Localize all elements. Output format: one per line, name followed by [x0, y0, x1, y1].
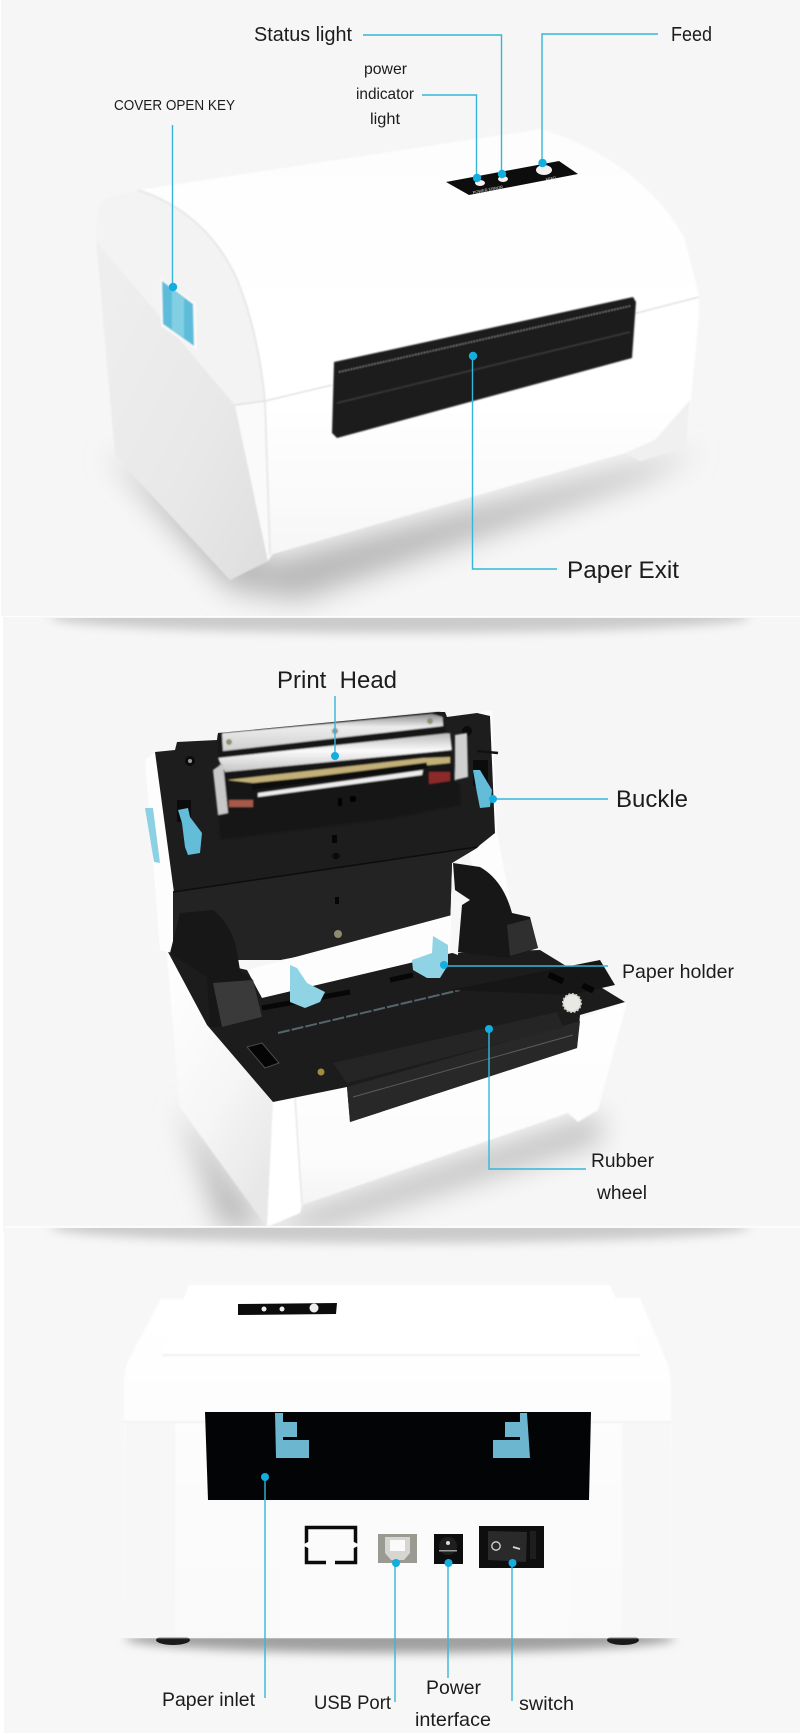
- label: Paper holder: [440, 961, 734, 983]
- cover open key, blue: [160, 278, 197, 350]
- USB port: [378, 1534, 417, 1563]
- panel: open printer interior: [145, 710, 627, 1228]
- printer body, front view: [96, 129, 699, 580]
- label: Paper holder: Paper holder: [622, 961, 734, 983]
- label: Paper inlet: [162, 1473, 269, 1711]
- label: Feed: [538, 24, 712, 167]
- control label plate: [446, 161, 578, 195]
- label: switch: [508, 1559, 574, 1715]
- white base shell: [167, 953, 627, 1227]
- rocker switch: [479, 1526, 544, 1568]
- label: Power interface: interface: [415, 1709, 491, 1731]
- right spool holder: [450, 863, 538, 958]
- lid buckles, blue: [178, 808, 202, 855]
- lid inner wall: [155, 712, 498, 960]
- label: COVER OPEN KEY: COVER OPEN KEY: [114, 98, 235, 114]
- connector panel: [277, 1519, 572, 1638]
- label: Buckle: [489, 786, 688, 813]
- label: Feed: Feed: [671, 24, 712, 46]
- label: power indicator light: light: [370, 111, 401, 128]
- white lid shell: [145, 752, 178, 952]
- paper guides, blue: [275, 1413, 530, 1458]
- control label plate: POWER ERROR: [472, 184, 503, 195]
- paper exit slot: [332, 297, 636, 438]
- divider band between panels two and three: [40, 1226, 760, 1255]
- power jack: [434, 1534, 463, 1564]
- ground shadow: [122, 1638, 678, 1660]
- panel: rear view of the printer: [124, 1285, 675, 1653]
- label: Power interface: [415, 1559, 491, 1731]
- left spool holder: [170, 910, 262, 1027]
- floor shadow: [180, 1105, 600, 1228]
- label: USB Port: [314, 1559, 400, 1714]
- label: Rubber wheel: [485, 1025, 655, 1204]
- divider band between panels one and two: [0, 601, 800, 1233]
- label: Rubber wheel: Rubber: [591, 1151, 655, 1172]
- label: Power interface: Power: [426, 1677, 481, 1699]
- label: power indicator light: [356, 61, 481, 182]
- gear wheel: [563, 994, 581, 1012]
- control label plate: FEED: [545, 175, 557, 182]
- black base top: [168, 950, 625, 1122]
- label: USB Port: USB Port: [314, 1693, 392, 1714]
- paper guides, blue: [290, 965, 325, 1008]
- label: Paper Exit: [469, 352, 679, 584]
- label: COVER OPEN KEY: [114, 98, 235, 291]
- rubber feet: [156, 1635, 639, 1645]
- label: Status light: Status light: [254, 24, 352, 46]
- floor shadow under printer: [105, 450, 700, 600]
- print head assembly: [213, 712, 468, 840]
- label: switch: switch: [519, 1693, 574, 1715]
- serial port: [302, 1528, 360, 1566]
- side cover key, blue: [145, 808, 160, 863]
- white paper path: [247, 900, 460, 1000]
- top label plate: [238, 1303, 337, 1315]
- label: power indicator light: indicator: [356, 86, 415, 103]
- label: Status light: [254, 24, 506, 178]
- label: Buckle: Buckle: [616, 786, 688, 813]
- label: Print Head: Print Head: [277, 667, 397, 694]
- label: Paper inlet: Paper inlet: [162, 1689, 256, 1711]
- label: Rubber wheel: wheel: [596, 1183, 647, 1204]
- rear body: [124, 1285, 671, 1638]
- label: power indicator light: power: [364, 61, 408, 78]
- paper inlet opening: [205, 1412, 591, 1500]
- panel: front view of the printer: [1, 0, 800, 616]
- label: Print Head: [277, 667, 397, 760]
- label: Paper Exit: Paper Exit: [567, 557, 679, 584]
